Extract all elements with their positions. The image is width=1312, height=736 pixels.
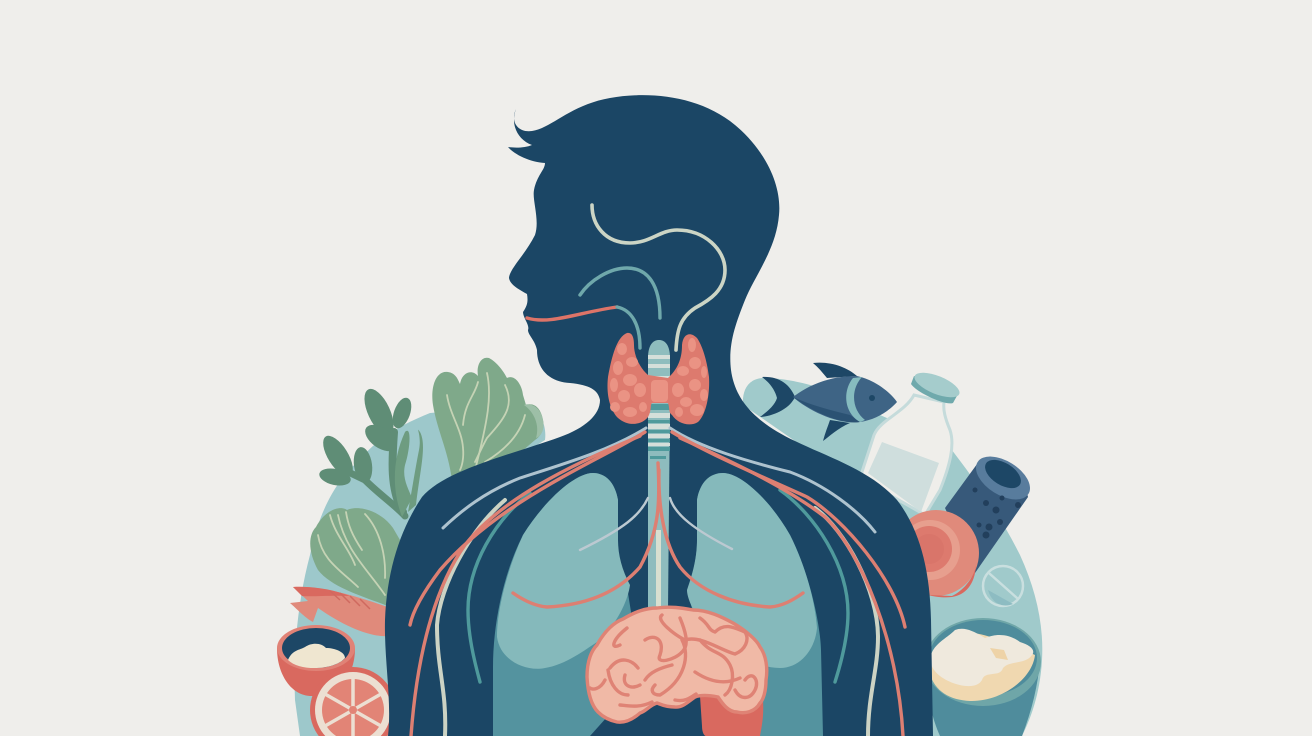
icon: bowl of rice bbox=[277, 625, 355, 696]
chart: nerve lines bbox=[410, 205, 905, 736]
icon: brain with stem bbox=[587, 607, 767, 736]
icon: pill bbox=[983, 566, 1023, 606]
icon: dark perforated tube bbox=[945, 448, 1037, 573]
icon: fish bbox=[760, 363, 897, 441]
panel: body silhouette bbox=[385, 95, 933, 736]
icon: coral rolled meat bbox=[893, 510, 979, 597]
panel: left teal backdrop blob bbox=[295, 405, 545, 736]
icon: milk bottle bbox=[860, 368, 963, 515]
icon: seaweed sprig bbox=[317, 385, 423, 517]
icon: salmon fillet bbox=[290, 587, 390, 636]
icon: thyroid gland bbox=[607, 333, 709, 424]
icon: yogurt bowl bbox=[925, 618, 1041, 736]
panel: right lung bbox=[687, 473, 823, 736]
icon: upper lettuce leaf bbox=[432, 358, 544, 480]
panel: left lung bbox=[493, 473, 631, 736]
panel: right teal backdrop blob bbox=[743, 378, 1042, 736]
icon: grapefruit slice bbox=[310, 667, 396, 736]
chart: trachea tube bbox=[648, 340, 670, 610]
icon: lower lettuce leaf bbox=[310, 508, 400, 606]
